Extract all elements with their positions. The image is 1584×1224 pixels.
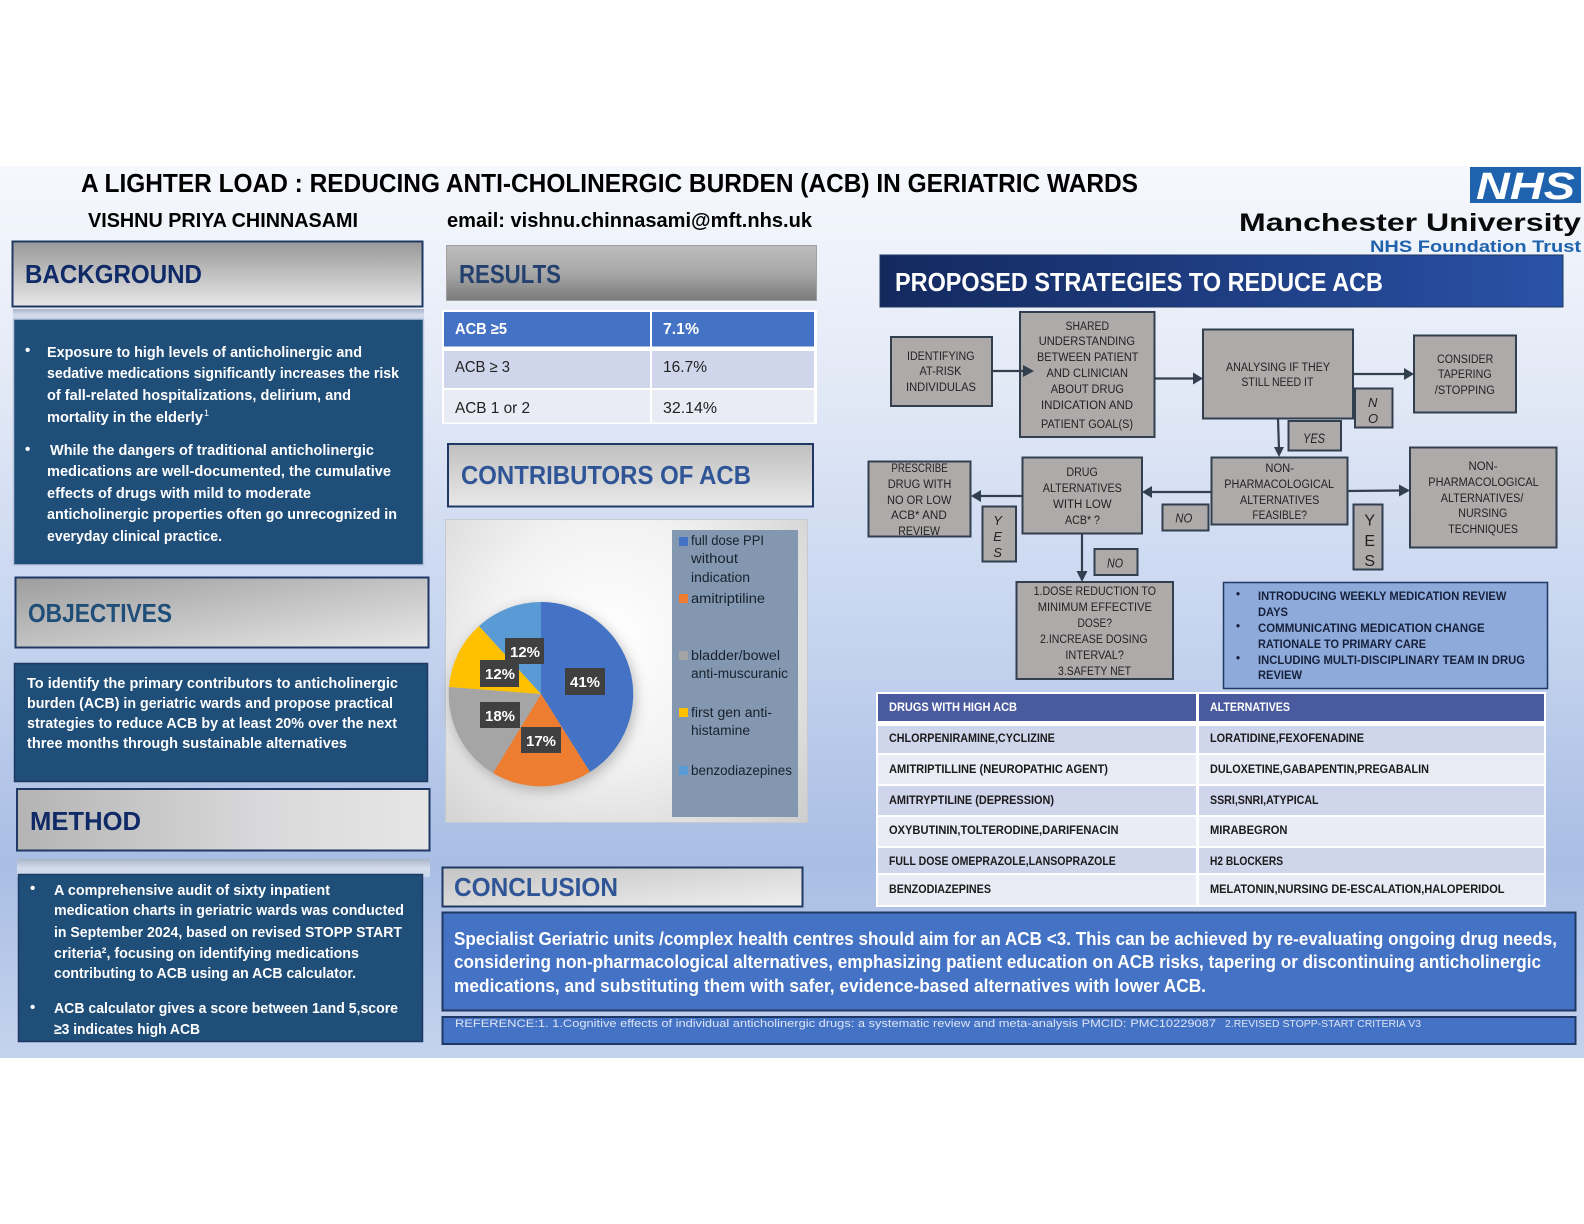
panel: strategy bullets: •	[1236, 653, 1240, 665]
pie legend: indication	[691, 570, 750, 585]
panel: conclusion text	[442, 912, 1576, 1010]
NHS trust logo	[1239, 166, 1581, 256]
poster background	[0, 166, 1584, 1058]
label: yes vertical right: E	[1364, 533, 1375, 550]
heading: results: RESULTS	[459, 259, 561, 289]
label: yes vertical left: S	[993, 545, 1002, 560]
flowchart box: non-pharmacological feasible	[1212, 458, 1348, 524]
results table: ACB ≥5	[455, 321, 507, 338]
heading: proposed strategies	[880, 255, 1563, 307]
panel: conclusion text: considering non-pharmacological alternatives, emphasizing patient education on ACB risks, tapering or discontinuing anticholinergic	[454, 952, 1541, 972]
results table	[442, 310, 817, 424]
author name: VISHNU PRIYA CHINNASAMI	[88, 210, 358, 232]
panel: method text: •	[30, 999, 35, 1016]
flowchart box: prescribe low ACB	[868, 462, 970, 538]
flowchart box: non-pharmacological feasible: NON-	[1265, 463, 1294, 475]
arrow: shared to analysing	[1155, 372, 1203, 384]
pie chart panel	[446, 520, 808, 822]
flowchart box: dose reduction: 3.SAFETY NET	[1058, 666, 1131, 678]
drug alternatives table: BENZODIAZEPINES	[889, 884, 991, 896]
flowchart box: drug alternatives: ACB* ?	[1065, 515, 1100, 527]
flowchart box: consider tapering	[1414, 336, 1516, 412]
title: A LIGHTER LOAD : REDUCING ANTI-CHOLINERGIC BURDEN (ACB) IN GERIATRIC WARDS	[81, 168, 1138, 198]
pie legend: full dose PPI	[691, 533, 764, 548]
flowchart box: non-pharmacological feasible: PHARMACOLOGICAL	[1224, 479, 1335, 491]
flowchart box: shared understanding: PATIENT GOAL(S)	[1041, 419, 1133, 431]
drug alternatives table: AMITRYPTILINE (DEPRESSION)	[889, 795, 1054, 807]
flowchart box: dose reduction: 2.INCREASE DOSING	[1040, 634, 1148, 646]
heading: objectives	[16, 578, 428, 648]
panel: objectives text: burden (ACB) in geriatric wards and propose practical	[27, 695, 393, 712]
flowchart box: non-pharmacological nursing: ALTERNATIVES/	[1441, 493, 1524, 505]
flowchart box: identifying at-risk: IDENTIFYING	[907, 351, 975, 363]
panel: method text: criteria², focusing on identifying medications	[54, 945, 359, 962]
heading: proposed strategies: PROPOSED STRATEGIES TO REDUCE ACB	[895, 267, 1383, 297]
heading: conclusion	[442, 868, 802, 906]
label: yes vertical right	[1354, 504, 1382, 570]
flowchart box: non-pharmacological nursing: TECHNIQUES	[1448, 524, 1518, 536]
heading: conclusion: CONCLUSION	[454, 872, 618, 902]
pie legend: first gen anti-	[691, 705, 772, 720]
flowchart box: non-pharmacological nursing	[1410, 448, 1556, 548]
label: yes: YES	[1303, 430, 1326, 446]
heading: background: BACKGROUND	[25, 259, 202, 289]
heading: results	[446, 246, 816, 300]
drug alternatives table: SSRI,SNRI,ATYPICAL	[1210, 795, 1318, 807]
panel: background text: effects of drugs with mild to moderate	[47, 485, 311, 502]
flowchart box: non-pharmacological nursing: NON-	[1468, 461, 1498, 473]
drug alternatives table: MELATONIN,NURSING DE-ESCALATION,HALOPERIDOL	[1210, 884, 1504, 896]
author email: email: vishnu.chinnasami@mft.nhs.uk	[447, 210, 813, 232]
panel: strategy bullets: INCLUDING MULTI-DISCIPLINARY TEAM IN DRUG	[1258, 655, 1525, 667]
flowchart box: analysing need: ANALYSING IF THEY	[1226, 362, 1330, 374]
panel: method text: •	[30, 880, 35, 897]
flowchart box: shared understanding: BETWEEN PATIENT	[1037, 352, 1138, 364]
panel: background text: everyday clinical practice.	[47, 528, 222, 545]
label: yes vertical right: Y	[1364, 513, 1375, 530]
pie legend	[672, 530, 798, 817]
panel: objectives text	[14, 664, 428, 782]
heading: background	[12, 242, 422, 306]
pie data labels: 12%	[485, 666, 515, 683]
drug alternatives table: CHLORPENIRAMINE,CYCLIZINE	[889, 733, 1055, 745]
panel: conclusion text: medications, and substituting them with safer, evidence-based alternatives with lower ACB.	[454, 976, 1206, 996]
drug alternatives table: DRUGS WITH HIGH ACB	[889, 702, 1017, 714]
flowchart box: drug alternatives	[1022, 458, 1142, 534]
flowchart box: prescribe low ACB: NO OR LOW	[887, 495, 952, 507]
panel: strategy bullets: INTRODUCING WEEKLY MEDICATION REVIEW	[1258, 591, 1507, 603]
heading: method: METHOD	[30, 806, 141, 836]
panel: strategy bullets: RATIONALE TO PRIMARY CARE	[1258, 639, 1426, 651]
label: no	[1355, 388, 1392, 428]
drug alternatives table: DULOXETINE,GABAPENTIN,PREGABALIN	[1210, 764, 1429, 776]
drug alternatives table: H2 BLOCKERS	[1210, 856, 1283, 868]
drug alternatives table: LORATIDINE,FEXOFENADINE	[1210, 733, 1364, 745]
flowchart box: drug alternatives: DRUG	[1066, 467, 1098, 479]
flowchart box: prescribe low ACB: ACB* AND	[891, 510, 947, 522]
panel: background text: Exposure to high levels of anticholinergic and	[47, 344, 362, 361]
pie data labels	[480, 638, 605, 753]
panel: method text: ≥3 indicates high ACB	[54, 1021, 200, 1038]
panel: objectives text: three months through sustainable alternatives	[27, 735, 347, 752]
panel: strategy bullets: REVIEW	[1258, 670, 1302, 682]
label: yes vertical left: E	[993, 529, 1002, 544]
heading: method	[17, 789, 430, 850]
pie legend: amitriptiline	[691, 591, 765, 606]
panel: background text: anticholinergic properties often go unrecognized in	[47, 506, 397, 523]
flowchart box: dose reduction: INTERVAL?	[1065, 650, 1124, 662]
pie data labels: 18%	[485, 708, 515, 725]
pie legend: benzodiazepines	[691, 763, 792, 778]
flowchart box: consider tapering: CONSIDER	[1437, 354, 1493, 366]
flowchart box: consider tapering: TAPERING	[1438, 369, 1492, 381]
label: yes vertical left	[982, 506, 1016, 562]
panel: method text	[18, 874, 422, 1042]
NHS trust logo: Manchester University	[1239, 209, 1581, 237]
panel: objectives text: To identify the primary contributors to anticholinergic	[27, 675, 398, 692]
arrow: analysing to non-pharmacological	[1274, 419, 1284, 457]
pie slices	[449, 602, 633, 786]
panel: method text: in September 2024, based on revised STOPP START	[54, 924, 402, 941]
label: no lower: NO	[1107, 557, 1123, 571]
flowchart box: identifying at-risk	[891, 337, 992, 406]
flowchart box: drug alternatives: WITH LOW	[1053, 499, 1112, 511]
drug alternatives table: AMITRIPTILLINE (NEUROPATHIC AGENT)	[889, 764, 1108, 776]
panel: strategy bullets: DAYS	[1258, 607, 1288, 619]
flowchart box: shared understanding: INDICATION AND	[1041, 400, 1133, 412]
pie legend: histamine	[691, 723, 750, 738]
results table: 16.7%	[663, 359, 707, 376]
flowchart box: identifying at-risk: INDIVIDULAS	[906, 382, 976, 394]
heading: contributors of ACB	[448, 444, 813, 506]
arrow: non-pharmacological to drug alternatives	[1142, 486, 1211, 498]
pie data labels: 12%	[510, 644, 540, 661]
panel: references: REFERENCE:1. 1.Cognitive effects of individual anticholinergic drugs: a systematic review and meta-analysis PMCID: PMC10229087	[455, 1018, 1216, 1030]
heading: contributors of ACB: CONTRIBUTORS OF ACB	[461, 460, 751, 490]
flowchart box: non-pharmacological nursing: NURSING	[1458, 508, 1507, 520]
panel: method text: medication charts in geriatric wards was conducted	[54, 902, 404, 919]
flowchart box: non-pharmacological feasible: ALTERNATIVES	[1240, 495, 1320, 507]
panel: conclusion text: Specialist Geriatric units /complex health centres should aim for an ACB <3. This can be achieved by re-evaluating ongoing drug needs,	[454, 929, 1557, 949]
results table: 32.14%	[663, 400, 717, 417]
flowchart box: shared understanding: ABOUT DRUG	[1051, 384, 1124, 396]
panel: strategy bullets: COMMUNICATING MEDICATION CHANGE	[1258, 623, 1485, 635]
flowchart box: identifying at-risk: AT-RISK	[920, 366, 962, 378]
results table: ACB 1 or 2	[455, 400, 530, 417]
results table: ACB ≥ 3	[455, 359, 510, 376]
flowchart box: prescribe low ACB: DRUG WITH	[888, 479, 951, 491]
flowchart box: non-pharmacological feasible: FEASIBLE?	[1252, 510, 1307, 522]
arrow: non-pharmacological to nursing	[1348, 484, 1410, 496]
panel: background text: •	[25, 342, 30, 359]
flowchart box: non-pharmacological nursing: PHARMACOLOGICAL	[1428, 477, 1539, 489]
flowchart box: drug alternatives: ALTERNATIVES	[1043, 483, 1122, 495]
panel: background text: While the dangers of traditional anticholinergic	[50, 442, 374, 459]
drug alternatives table	[876, 692, 1546, 907]
label: no lower	[1094, 549, 1138, 575]
panel: background text: mortality in the elderly	[47, 409, 204, 426]
arrow: identifying to shared	[992, 365, 1034, 377]
flowchart box: prescribe low ACB: REVIEW	[898, 526, 940, 538]
flowchart box: analysing need	[1203, 330, 1353, 418]
label: no left: NO	[1175, 512, 1193, 526]
flowchart box: shared understanding	[1020, 312, 1154, 437]
pie data labels: 17%	[526, 733, 556, 750]
label: yes vertical right: S	[1364, 553, 1375, 570]
panel: method text: A comprehensive audit of sixty inpatient	[54, 882, 330, 899]
flowchart box: consider tapering: /STOPPING	[1435, 385, 1495, 397]
NHS trust logo: NHS	[1476, 166, 1575, 208]
panel: background text: sedative medications significantly increases the risk	[47, 365, 400, 382]
panel: references	[442, 1017, 1576, 1044]
panel: strategy bullets: •	[1236, 589, 1240, 601]
panel: method text: contributing to ACB using an ACB calculator.	[54, 965, 356, 982]
panel: background text: 1	[204, 408, 209, 418]
drug alternatives table: MIRABEGRON	[1210, 825, 1288, 837]
NHS trust logo: NHS Foundation Trust	[1370, 237, 1581, 256]
pie legend: bladder/bowel	[691, 648, 780, 663]
flowchart box: dose reduction: MINIMUM EFFECTIVE	[1038, 602, 1152, 614]
panel: background text: medications are well-documented, the cumulative	[47, 463, 391, 480]
arrow: analysing to consider	[1353, 368, 1414, 380]
label: no: N	[1368, 395, 1378, 410]
arrow: drug alternatives to dose reduction	[1076, 534, 1088, 582]
flowchart box: prescribe low ACB: PRESCRIBE	[891, 463, 948, 475]
results table: 7.1%	[663, 321, 699, 338]
label: yes vertical left: Y	[993, 513, 1003, 528]
flowchart box: shared understanding: UNDERSTANDING	[1039, 336, 1135, 348]
drug alternatives table: OXYBUTININ,TOLTERODINE,DARIFENACIN	[889, 825, 1118, 837]
label: no left	[1162, 504, 1208, 530]
flowchart box: shared understanding: AND CLINICIAN	[1046, 368, 1128, 380]
panel: strategy bullets: •	[1236, 621, 1240, 633]
pie legend: without	[690, 551, 738, 566]
flowchart box: dose reduction: 1.DOSE REDUCTION TO	[1034, 586, 1156, 598]
flowchart box: dose reduction	[1016, 582, 1173, 679]
panel: background text: •	[25, 441, 30, 458]
panel: background text: of fall-related hospitalizations, delirium, and	[47, 387, 351, 404]
flowchart box: dose reduction: DOSE?	[1078, 618, 1112, 630]
panel: background text	[14, 319, 424, 565]
drug alternatives table: ALTERNATIVES	[1210, 702, 1290, 714]
label: no: O	[1368, 411, 1378, 426]
label: yes	[1288, 421, 1341, 450]
flowchart box: analysing need: STILL NEED IT	[1241, 377, 1313, 389]
flowchart box: shared understanding: SHARED	[1066, 321, 1109, 333]
pie data labels: 41%	[570, 674, 600, 691]
panel: method text: ACB calculator gives a score between 1and 5,score	[54, 1000, 398, 1017]
pie legend: anti-muscuranic	[691, 666, 788, 681]
heading: objectives: OBJECTIVES	[28, 598, 172, 628]
drug alternatives table: FULL DOSE OMEPRAZOLE,LANSOPRAZOLE	[889, 856, 1116, 868]
arrow: drug alternatives to prescribe	[971, 490, 1022, 502]
panel: references: 2.REVISED STOPP-START CRITERIA V3	[1225, 1018, 1421, 1030]
panel: strategy bullets	[1224, 582, 1548, 688]
panel: objectives text: strategies to reduce ACB by at least 20% over the next	[27, 715, 397, 732]
